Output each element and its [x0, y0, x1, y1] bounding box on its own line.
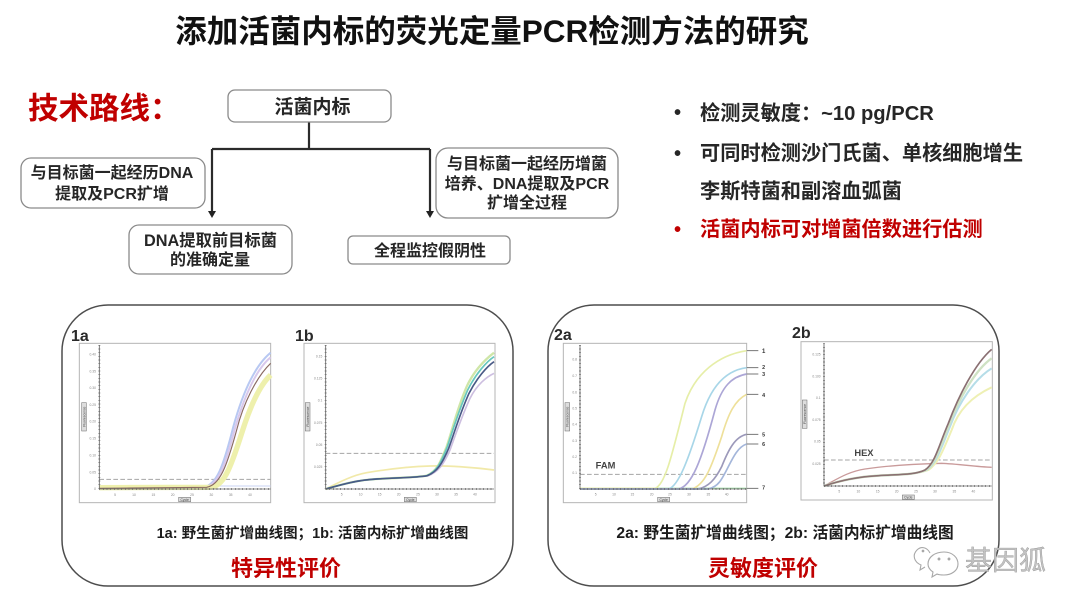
chart 2b: HEX internal standard curves: 0.100 [812, 374, 821, 378]
chart 2b: HEX internal standard curves: 25 [914, 490, 918, 494]
chart 2a: FAM dilution curves: 10 [612, 492, 616, 496]
heading: specificity evaluation: 特异性评价 [231, 556, 341, 581]
curve number leaders: 3 [762, 372, 765, 378]
chart 1a: wild strain amplification curves: 0.25 [90, 403, 96, 407]
chart 2a: FAM dilution curves: 25 [668, 492, 672, 496]
heading: technical route: 技术路线： [28, 92, 180, 126]
chart 1b: internal standard amplification curves: Cycle [406, 498, 415, 502]
chart 1b: internal standard amplification curves: 0.025 [314, 465, 322, 469]
chart 2b: HEX internal standard curves: 35 [952, 490, 956, 494]
chart 1b: internal standard amplification curves: 35 [454, 492, 458, 496]
bullet list: key findings: • [674, 219, 681, 241]
box: whole process: 培养、DNA提取及PCR [445, 174, 610, 193]
curve number leaders: 5 [762, 433, 765, 439]
chart 1a: wild strain amplification curves: 30 [209, 493, 213, 497]
chart 2a: FAM dilution curves: 0.4 [572, 423, 577, 427]
caption: panel 2: 2a: 野生菌扩增曲线图；2b: 活菌内标扩增曲线图 [616, 523, 954, 542]
chart 2a: FAM dilution curves: 40 [725, 492, 729, 496]
chart 1a: wild strain amplification curves: 0.05 [90, 470, 96, 474]
chart 2a: FAM dilution curves: 0.6 [572, 390, 577, 394]
connector lines with arrows [208, 122, 434, 218]
chart 1b: internal standard amplification curves: 30 [435, 492, 439, 496]
chart 1b: internal standard amplification curves: 10 [359, 492, 363, 496]
chart 2b: HEX internal standard curves: 40 [971, 490, 975, 494]
chart 1b: internal standard amplification curves [304, 343, 495, 503]
chart 1a: wild strain amplification curves: 0 [94, 487, 96, 491]
label 2a: 2a [554, 327, 572, 344]
chart 2a: FAM dilution curves: 30 [687, 492, 691, 496]
curve number leaders [747, 349, 766, 492]
label 2b: 2b [792, 325, 811, 342]
box: accurate quantification: DNA提取前目标菌 [144, 231, 277, 250]
box: whole process [436, 148, 618, 218]
chart 1a: wild strain amplification curves: 25 [190, 493, 194, 497]
label: HEX: HEX [854, 448, 874, 458]
chart 1b: internal standard amplification curves: 0.125 [314, 376, 322, 380]
box: DNA extraction and PCR: 与目标菌一起经历DNA [31, 164, 194, 182]
watermark: WeChat account [914, 546, 1046, 577]
label 1b: 1b [295, 328, 314, 345]
curve number leaders: 6 [762, 442, 765, 448]
chart 2a: FAM dilution curves: 20 [650, 492, 654, 496]
icon: chat bubbles [914, 548, 958, 577]
chart 1b: internal standard amplification curves: 5 [341, 492, 343, 496]
chart 1a: wild strain amplification curves: 40 [248, 493, 252, 497]
bullet list: key findings: 可同时检测沙门氏菌、单核细胞增生 [700, 141, 1023, 165]
title: 添加活菌内标的荧光定量PCR检测方法的研究 [175, 13, 809, 49]
chart 2b: HEX internal standard curves: 0.075 [812, 418, 821, 422]
box: whole process: 与目标菌一起经历增菌 [447, 155, 607, 173]
chart 2b: HEX internal standard curves: 30 [933, 490, 937, 494]
bullet list: key findings: 活菌内标可对增菌倍数进行估测 [700, 217, 983, 241]
chart 1a: wild strain amplification curves: Cycle [181, 498, 189, 502]
chart 2b: HEX internal standard curves: 5 [838, 490, 840, 494]
chart 1b: internal standard amplification curves: 0.075 [314, 421, 322, 425]
chart 1b: internal standard amplification curves: 0.05 [316, 443, 322, 447]
chart 2b: HEX internal standard curves: Fluorescence [803, 404, 807, 424]
chart 2b: HEX internal standard curves: 0.1 [816, 396, 821, 400]
chart 2a: FAM dilution curves: 0.1 [572, 471, 577, 475]
watermark text: 基因狐 [965, 546, 1046, 576]
chart 1a: wild strain amplification curves: 0.20 [90, 420, 96, 424]
label: FAM: FAM [596, 461, 616, 471]
chart 2b: HEX internal standard curves: Cycle [904, 496, 913, 500]
caption: panel 1: 1a: 野生菌扩增曲线图；1b: 活菌内标扩增曲线图 [157, 524, 468, 542]
chart 2b: HEX internal standard curves: 10 [856, 490, 860, 494]
chart 1a: wild strain amplification curves: 0.30 [90, 386, 96, 390]
box: internal standard: 活菌内标 [274, 96, 351, 118]
box: whole process: 扩增全过程 [487, 193, 567, 212]
curve number leaders: 2 [762, 365, 765, 371]
box: false negative monitoring [348, 236, 510, 264]
chart 1a: wild strain amplification curves: 20 [171, 493, 175, 497]
chart 2b: HEX internal standard curves: 15 [876, 490, 880, 494]
chart 2a: FAM dilution curves: Fluorescence [566, 407, 570, 427]
chart 2b: HEX internal standard curves [801, 342, 992, 500]
bullet list: key findings [674, 101, 1023, 241]
chart 2a: FAM dilution curves: 5 [595, 492, 597, 496]
bullet list: key findings: • [674, 102, 681, 124]
chart 2a: FAM dilution curves: Cycle [660, 498, 668, 502]
chart 2a: FAM dilution curves: 0.7 [572, 374, 577, 378]
chart 1a: wild strain amplification curves: 10 [132, 493, 136, 497]
chart 1a: wild strain amplification curves [79, 343, 271, 503]
box: internal standard [228, 90, 391, 122]
label 1a: 1a [71, 328, 89, 345]
chart 1a: wild strain amplification curves: Fluorescence [82, 407, 86, 427]
chart 1b: internal standard amplification curves: 0.1 [318, 399, 322, 403]
chart 1b: internal standard amplification curves: 25 [416, 492, 420, 496]
curve number leaders: 1 [762, 349, 766, 355]
box: false negative monitoring: 全程监控假阴性 [374, 241, 486, 260]
box: DNA extraction and PCR [21, 158, 205, 208]
chart 1a: wild strain amplification curves: 0.15 [90, 437, 96, 441]
bullet list: key findings: • [674, 143, 681, 165]
chart 1b: internal standard amplification curves: 0.15 [316, 354, 322, 358]
chart 1b: internal standard amplification curves: Fluorescence [306, 407, 310, 427]
chart 1b: internal standard amplification curves: 20 [397, 492, 401, 496]
chart 1a: wild strain amplification curves: 0.40 [90, 352, 96, 356]
box: accurate quantification [129, 225, 292, 274]
chart 2a: FAM dilution curves: 0.5 [572, 406, 577, 410]
chart 1a: wild strain amplification curves: 5 [114, 493, 116, 497]
bullet list: key findings: 检测灵敏度：~10 pg/PCR [700, 101, 934, 125]
chart 2b: HEX internal standard curves: 0.05 [814, 440, 821, 444]
flow diagram: technical route [21, 90, 618, 274]
chart 2b: HEX internal standard curves: 20 [895, 490, 899, 494]
chart 2a: FAM dilution curves: 0.2 [572, 455, 577, 459]
chart 1a: wild strain amplification curves: 35 [229, 493, 233, 497]
panel: sensitivity evaluation [548, 305, 999, 586]
chart 2b: HEX internal standard curves: 0.125 [812, 352, 821, 356]
curve number leaders: 4 [762, 393, 765, 399]
chart 1a: wild strain amplification curves: 0.10 [90, 453, 96, 457]
chart 1b: internal standard amplification curves: 15 [378, 492, 382, 496]
chart 2b: HEX internal standard curves: 0.025 [812, 462, 821, 466]
curve number leaders: 7 [762, 486, 765, 492]
chart 2a: FAM dilution curves [563, 343, 766, 503]
bullet list: key findings: 李斯特菌和副溶血弧菌 [700, 179, 902, 203]
box: DNA extraction and PCR: 提取及PCR扩增 [55, 184, 169, 203]
chart 1b: internal standard amplification curves: 40 [473, 492, 477, 496]
heading: sensitivity evaluation: 灵敏度评价 [708, 556, 818, 581]
chart 2a: FAM dilution curves: 15 [630, 492, 634, 496]
panel: specificity evaluation [62, 305, 513, 586]
box: accurate quantification: 的准确定量 [170, 250, 250, 269]
chart 1a: wild strain amplification curves: 15 [151, 493, 155, 497]
chart 2a: FAM dilution curves: 0.3 [572, 439, 577, 443]
chart 2a: FAM dilution curves: 0.8 [572, 358, 577, 362]
chart 2a: FAM dilution curves: 35 [706, 492, 710, 496]
chart 1a: wild strain amplification curves: 0.35 [90, 369, 96, 373]
